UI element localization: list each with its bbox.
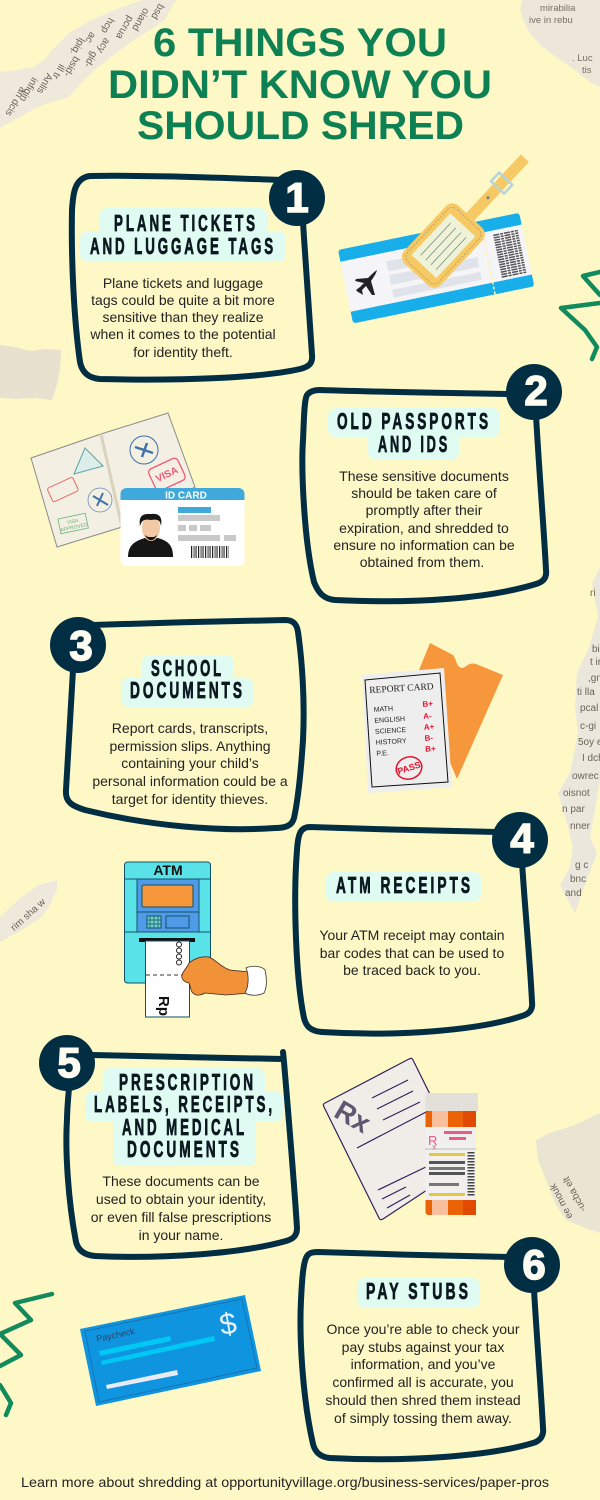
- heading: [85, 1068, 283, 1166]
- panel outline: [300, 1252, 543, 1459]
- luggage tag: [398, 141, 543, 292]
- body text: tags could be quite a bit more: [91, 292, 275, 308]
- body text: [91, 1173, 271, 1243]
- heading: [326, 872, 481, 902]
- check lines: [99, 1336, 171, 1356]
- torn paper: right strip: c-gi: [580, 721, 596, 732]
- boarding pass: [338, 213, 534, 323]
- number badge 1: 1: [285, 174, 309, 221]
- body text: pay stubs against your tax: [342, 1339, 504, 1355]
- torn paper: top left: Anlis: [34, 71, 54, 95]
- torn paper: top left: lpiq.: [68, 36, 87, 57]
- cuff: [245, 966, 266, 995]
- body text: These documents can be: [102, 1173, 260, 1189]
- body text: in your name.: [139, 1227, 223, 1243]
- body text: of simply tossing them away.: [334, 1410, 512, 1426]
- torn paper: right strip: ti lla: [577, 687, 595, 698]
- number badge 2: 2: [524, 367, 548, 414]
- heading: [80, 208, 286, 262]
- torn paper: top left: bsd: [148, 2, 166, 21]
- body text: [325, 1321, 521, 1426]
- torn paper: top right: tis: [582, 65, 592, 76]
- stamp: plane circle: [88, 488, 112, 512]
- torn paper: left lower: rim sha w: [9, 896, 49, 934]
- torn paper: top right: ive in rebu: [529, 15, 573, 26]
- stamp: arrival: [130, 436, 158, 464]
- body text: ensure no information can be: [333, 537, 515, 553]
- illustration: prescription and pill bottle: [323, 1058, 478, 1220]
- illustration: passport and ID card: [31, 413, 244, 566]
- ATM body: [124, 862, 210, 983]
- heading: [328, 408, 500, 460]
- report paper: [362, 668, 452, 793]
- torn paper: top left: oiand: [129, 6, 151, 33]
- body text: used to obtain your identity,: [96, 1191, 266, 1207]
- torn paper: right strip: bi: [592, 644, 600, 655]
- illustration: ATM and hand: Rp: [155, 996, 172, 1016]
- body text: expiration, and shredded to: [339, 520, 509, 536]
- pill bottle: [426, 1093, 478, 1111]
- number badge 2: [506, 364, 562, 420]
- panel outline: [66, 620, 304, 829]
- number badge 5: [39, 1035, 95, 1091]
- torn paper: top left: bsid-: [61, 54, 81, 78]
- dollar sign: $: [217, 1307, 239, 1342]
- body text: promptly after their: [366, 502, 483, 518]
- hand: [182, 957, 249, 995]
- torn paper: top left: ill tr: [49, 62, 67, 81]
- footer link text: Learn more about shredding at opportunityvillage.org/business-services/paper-pros: [21, 1474, 549, 1490]
- illustration: paycheck: [80, 1295, 261, 1406]
- orange folder: [415, 643, 503, 779]
- body text: be traced back to you.: [343, 962, 481, 978]
- heading: SCHOOL: [151, 655, 224, 681]
- illustration: boarding pass and luggage tag: [338, 141, 543, 323]
- heading: PRESCRIPTION: [119, 1069, 256, 1095]
- body text: sensitive than they realize: [102, 309, 264, 325]
- report text: [369, 682, 438, 758]
- body text: for identity theft.: [133, 344, 233, 360]
- body text: personal information could be a: [92, 773, 288, 789]
- green squiggle: left: [0, 1294, 52, 1415]
- illustration: prescription and pill bottle: x: [432, 1142, 437, 1152]
- heading: DOCUMENTS: [130, 677, 245, 703]
- body text: permission slips. Anything: [109, 738, 271, 754]
- torn paper: right lower: -ucba elt: [561, 1174, 589, 1213]
- number badge 4: [492, 812, 548, 868]
- panel: plane tickets and luggage tags: [72, 170, 325, 380]
- torn paper: left middle: [0, 345, 61, 400]
- torn paper: top left: gid-: [81, 49, 99, 69]
- stamp: visa: [147, 457, 186, 492]
- heading: [121, 655, 254, 707]
- torn paper: right strip: oisnot: [563, 788, 590, 799]
- number badge 4: 4: [510, 815, 534, 862]
- body text: when it comes to the potential: [89, 326, 276, 342]
- body text: should be taken care of: [351, 485, 497, 501]
- number badge 5: 5: [57, 1039, 81, 1086]
- green squiggle: right: [561, 272, 600, 359]
- torn paper: right strip: nner: [570, 821, 591, 832]
- report text: A-: [423, 711, 432, 721]
- panel: old passports and IDs: [302, 364, 562, 601]
- report text: B-: [424, 733, 434, 743]
- torn paper: top left: ac: [83, 30, 98, 45]
- title: 6 THINGS YOU: [153, 21, 447, 65]
- number badge 3: 3: [69, 622, 93, 669]
- panel outline: [295, 827, 532, 1034]
- body text: Plane tickets and luggage: [103, 275, 263, 291]
- illustration: ATM and hand: [124, 862, 266, 1017]
- panel: prescription labels: [39, 1035, 297, 1257]
- torn paper: right strip: ri: [590, 588, 596, 599]
- report text: REPORT CARD: [369, 682, 434, 696]
- bottle label: [426, 1127, 476, 1200]
- stamp: visa approved: [58, 513, 89, 534]
- heading: AND IDS: [378, 431, 450, 457]
- illustration: ATM and hand: ATM: [153, 862, 183, 878]
- body text: obtained from them.: [360, 554, 484, 570]
- torn paper: left lower: [0, 880, 57, 942]
- torn paper: right strip: [558, 567, 600, 913]
- body text: containing your child’s: [121, 755, 259, 771]
- panel: ATM receipts: [295, 812, 548, 1034]
- heading: AND LUGGAGE TAGS: [90, 233, 276, 259]
- torn paper: right lower: [536, 1113, 600, 1233]
- heading: AND MEDICAL: [122, 1114, 247, 1140]
- torn paper: top left: an dcis: [2, 85, 28, 118]
- body text: [92, 720, 288, 807]
- stamp: visa: VISA: [154, 465, 180, 485]
- Rx mark: Rx: [329, 1094, 376, 1139]
- heading: ATM RECEIPTS: [336, 872, 473, 898]
- torn paper: right strip: owrec: [572, 771, 599, 782]
- report text: B+: [425, 744, 436, 754]
- torn paper: top left: infiqin: [17, 75, 39, 103]
- heading: LABELS, RECEIPTS,: [94, 1091, 275, 1117]
- heading: DOCUMENTS: [127, 1136, 242, 1162]
- torn paper: top left: [0, 0, 176, 128]
- torn paper: top right: . Luc: [572, 53, 593, 64]
- panel: pay stubs: [300, 1237, 560, 1459]
- report text: B+: [422, 699, 434, 709]
- torn paper: top left: pcrua: [113, 14, 135, 41]
- torn paper: right strip: n par: [562, 804, 585, 815]
- receipt: [146, 941, 190, 1017]
- body text: Once you’re able to check your: [326, 1321, 520, 1337]
- body text: [333, 468, 515, 570]
- body text: [319, 927, 505, 978]
- pass stamp: PASS: [396, 760, 422, 776]
- number badge 3: [50, 617, 106, 673]
- panel outline: [302, 390, 546, 601]
- illustration: prescription and pill bottle: R: [428, 1133, 437, 1148]
- report text: SCIENCE: [375, 727, 407, 736]
- report text: A+: [424, 722, 435, 732]
- report text: MATH: [374, 706, 393, 714]
- report text: HISTORY: [376, 738, 407, 747]
- torn paper: top left: hcp: [98, 16, 116, 35]
- number badge 6: 6: [522, 1241, 546, 1288]
- torn paper: right strip: pcal: [580, 703, 598, 714]
- body text: confirmed all is accurate, you: [332, 1374, 514, 1390]
- torn paper: right strip: bnc: [570, 874, 586, 885]
- torn paper: right strip: and: [565, 888, 582, 899]
- report text: ENGLISH: [374, 716, 405, 725]
- body text: These sensitive documents: [339, 468, 509, 484]
- airplane icon: [355, 270, 377, 295]
- title: DIDN’T KNOW YOU: [108, 63, 492, 107]
- ID card: [120, 488, 244, 566]
- title: SHOULD SHRED: [137, 104, 464, 148]
- title: [108, 21, 492, 148]
- number badge 6: [504, 1237, 560, 1293]
- heading: PLANE TICKETS: [114, 210, 258, 236]
- paycheck label: Paycheck: [95, 1326, 136, 1344]
- body text: target for identity thieves.: [112, 791, 268, 807]
- report text: P.E.: [376, 750, 389, 758]
- body text: Report cards, transcripts,: [112, 720, 268, 736]
- torn paper: right strip: g c: [575, 860, 588, 871]
- stamp: red: [47, 477, 79, 502]
- panel: school documents: [50, 617, 304, 829]
- stamp: triangle: [74, 448, 103, 474]
- body text: [89, 275, 276, 360]
- panel outline: [72, 176, 312, 380]
- stamp: visa approved: APPROVED: [60, 522, 89, 534]
- torn paper: top right: mirabilia: [540, 3, 576, 14]
- torn paper: right lower: ee mouk: [547, 1181, 576, 1221]
- heading: OLD PASSPORTS: [337, 408, 491, 434]
- heading: [357, 1278, 480, 1308]
- body text: information, and you’ve: [351, 1356, 496, 1372]
- heading: PAY STUBS: [366, 1278, 471, 1304]
- number badge 1: [269, 170, 325, 226]
- torn paper: top left: acy: [95, 36, 112, 55]
- body text: should then shred them instead: [325, 1392, 521, 1408]
- torn paper: top right: [520, 0, 600, 87]
- stamp: visa approved: VISA: [67, 518, 80, 526]
- body text: or even fill false prescriptions: [91, 1209, 271, 1225]
- panel outline: [66, 1052, 297, 1257]
- passport: [31, 413, 195, 547]
- illustration: report card: [362, 643, 503, 793]
- body text: bar codes that can be used to: [320, 945, 504, 961]
- ID card: ID CARD: [165, 490, 207, 502]
- pass stamp: [393, 754, 425, 782]
- prescription paper: [323, 1058, 465, 1220]
- body text: Your ATM receipt may contain: [319, 927, 505, 943]
- portrait: [128, 538, 173, 557]
